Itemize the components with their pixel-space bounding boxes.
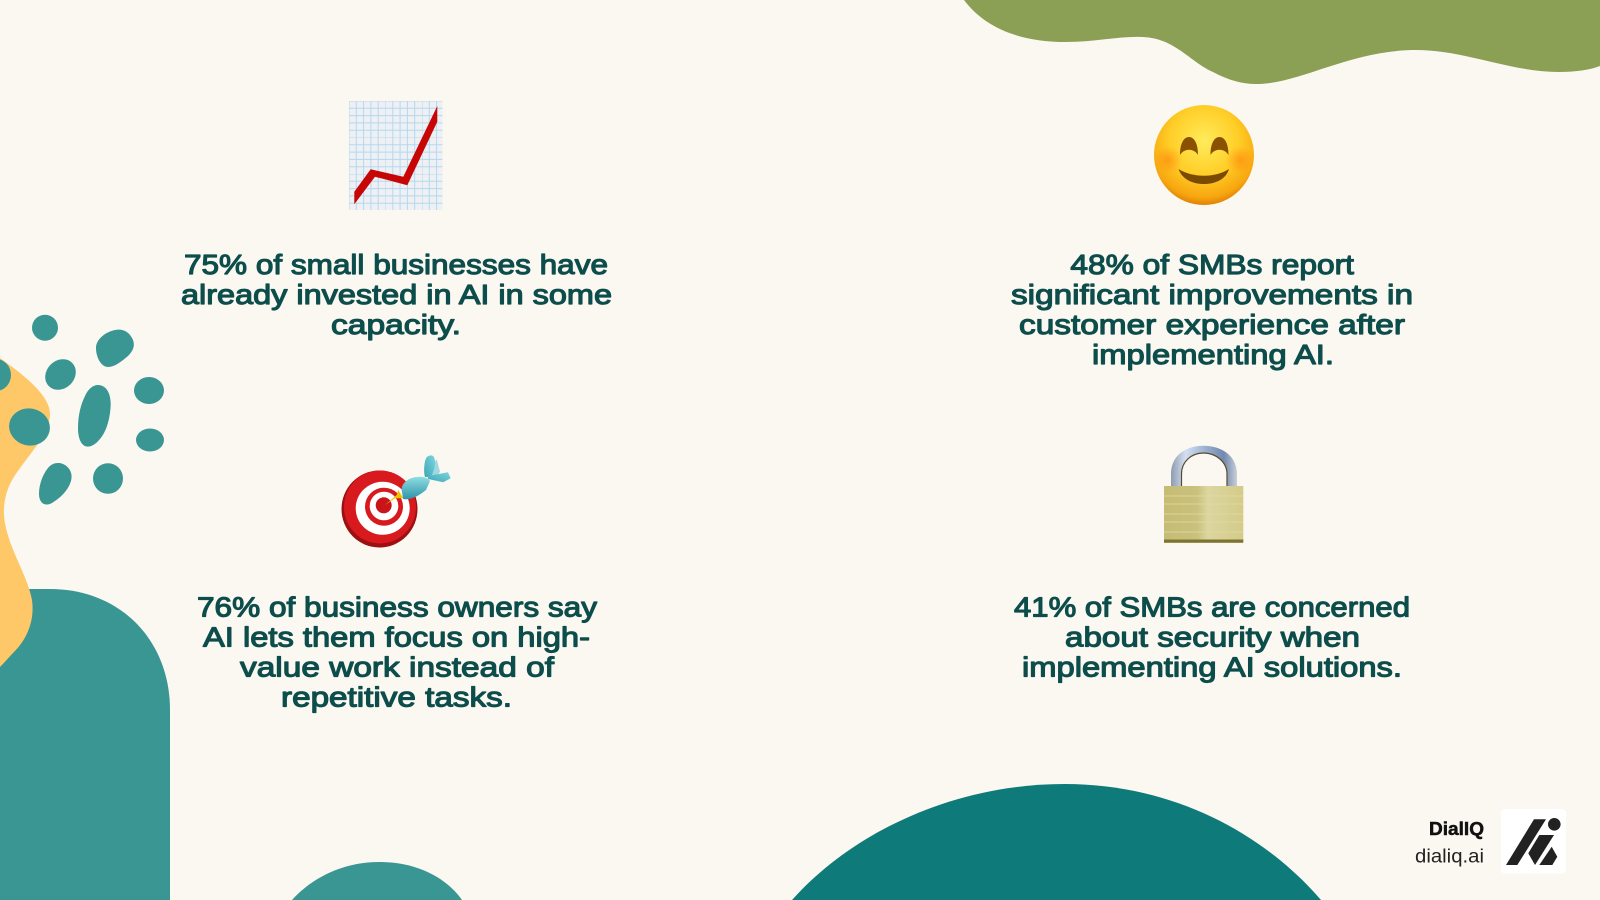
- stat text: 76 percent: value work instead of: [240, 652, 554, 682]
- icon: smiling face: [1154, 105, 1254, 205]
- stat text: 48 percent: implementing AI.: [1092, 339, 1334, 370]
- brand name: DialIQ: [1429, 819, 1484, 839]
- stat text: 75 percent: capacity.: [331, 309, 461, 340]
- stat text: 76 percent: repetitive tasks.: [281, 682, 512, 712]
- large dark teal arc, bottom: [792, 784, 1321, 900]
- stat text: 41 percent: about security when: [1065, 622, 1360, 652]
- panel: stat 76 percent: [197, 455, 605, 712]
- brand footer: [1415, 809, 1566, 874]
- logo: [1501, 809, 1566, 874]
- stat text: 76 percent: AI lets them focus on high-: [203, 622, 590, 652]
- teal dots cluster: [0, 315, 164, 505]
- stat text: 76 percent: 76% of business owners say: [197, 592, 597, 622]
- stat text: 75 percent: 75% of small businesses have: [184, 249, 608, 280]
- icon: dart hitting target: [342, 455, 451, 548]
- yellow blob, left edge: [0, 358, 50, 667]
- brand url: dialiq.ai: [1415, 846, 1484, 868]
- stat text: 41 percent: 41% of SMBs are concerned: [1014, 592, 1410, 622]
- small teal arc, bottom: [292, 862, 462, 900]
- panel: stat 48 percent: [1011, 105, 1421, 370]
- teal rounded block, bottom left: [0, 589, 170, 900]
- icon: padlock: [1164, 446, 1243, 543]
- stat text: 41 percent: implementing AI solutions.: [1022, 652, 1402, 682]
- stat text: 48 percent: 48% of SMBs report: [1070, 249, 1354, 280]
- stat text: 75 percent: already invested in AI in some: [181, 279, 612, 310]
- green wave, top right: [964, 0, 1600, 84]
- stat text: 48 percent: customer experience after: [1019, 309, 1405, 340]
- icon: chart increasing: [349, 101, 442, 210]
- panel: stat 75 percent: [181, 101, 620, 340]
- panel: stat 41 percent: [1014, 446, 1418, 682]
- stat text: 48 percent: significant improvements in: [1011, 279, 1413, 310]
